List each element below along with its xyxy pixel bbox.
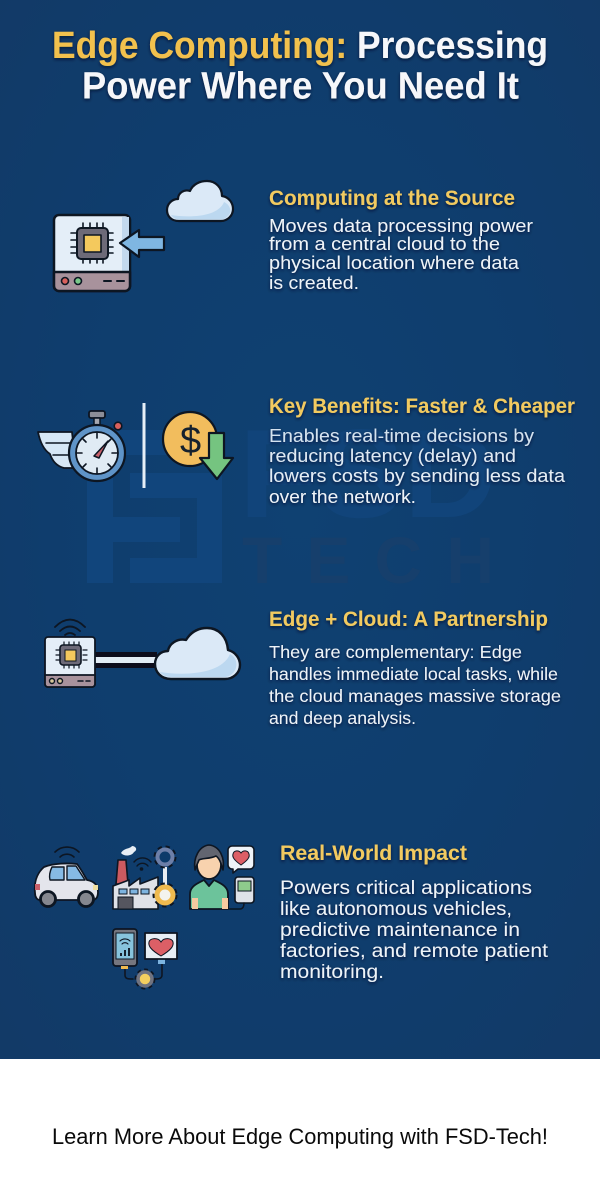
panel: computing at the source (54, 181, 533, 293)
watermark: FSD Tech logo (87, 403, 497, 597)
text block: real-world impact (280, 878, 549, 983)
text block: computing at the source: from a central cloud to the (269, 233, 500, 254)
heading: computing at the source: Computing at the Source (269, 187, 515, 210)
divider between icons (142, 403, 146, 488)
text block: computing at the source (269, 215, 533, 293)
text block: real-world impact: predictive maintenance in (280, 920, 520, 941)
icon: smart factory with gears (113, 846, 176, 909)
icon: phone, heart monitor and gear (113, 929, 177, 988)
watermark: FSD Tech logo: FSD (239, 403, 497, 544)
text block: real-world impact: factories, and remote patient (280, 941, 549, 962)
heading: key benefits: Key Benefits: Faster & Cheaper (269, 395, 575, 418)
icon: winged stopwatch (38, 411, 125, 481)
text block: key benefits: reducing latency (delay) and (269, 445, 516, 466)
icon: coin with down arrow: $ (180, 420, 201, 462)
watermark: FSD Tech logo: TECH (242, 523, 494, 597)
icon: coin with down arrow (163, 412, 233, 479)
icon: connected car (35, 847, 98, 906)
heading: real-world impact: Real-World Impact (280, 842, 467, 865)
text block: key benefits: Enables real-time decisions by (269, 425, 535, 446)
text block: edge + cloud (269, 642, 561, 728)
panel: key benefits (38, 395, 575, 507)
panel: real-world impact (35, 842, 549, 988)
footer call to action: Learn More About Edge Computing with FSD-Tech! (52, 1124, 548, 1149)
text block: computing at the source: Moves data processing power (269, 215, 533, 236)
text block: key benefits: lowers costs by sending less data (269, 465, 566, 486)
text block: edge + cloud: handles immediate local tasks, while (269, 664, 558, 684)
title (52, 25, 548, 108)
text block: real-world impact: like autonomous vehicles, (280, 899, 512, 920)
text block: real-world impact: monitoring. (280, 962, 384, 983)
title: Edge Computing: Processing (52, 25, 548, 67)
text block: computing at the source: is created. (269, 272, 359, 293)
panel: edge + cloud (45, 608, 561, 728)
title: Power Where You Need It (82, 66, 519, 108)
icon: edge server linked to cloud (45, 620, 240, 687)
text block: edge + cloud: the cloud manages massive storage (269, 686, 561, 706)
icon: edge server with chip, arrow and cloud (54, 181, 233, 291)
text block: key benefits: over the network. (269, 486, 416, 507)
text block: key benefits (269, 425, 566, 507)
heading: edge + cloud: Edge + Cloud: A Partnership (269, 608, 548, 631)
text block: computing at the source: physical location where data (269, 252, 520, 273)
text block: edge + cloud: They are complementary: Edge (269, 642, 522, 662)
text block: edge + cloud: and deep analysis. (269, 708, 416, 728)
icon: patient with heart bubble and monitor (190, 845, 254, 909)
text block: real-world impact: Powers critical applications (280, 878, 532, 899)
